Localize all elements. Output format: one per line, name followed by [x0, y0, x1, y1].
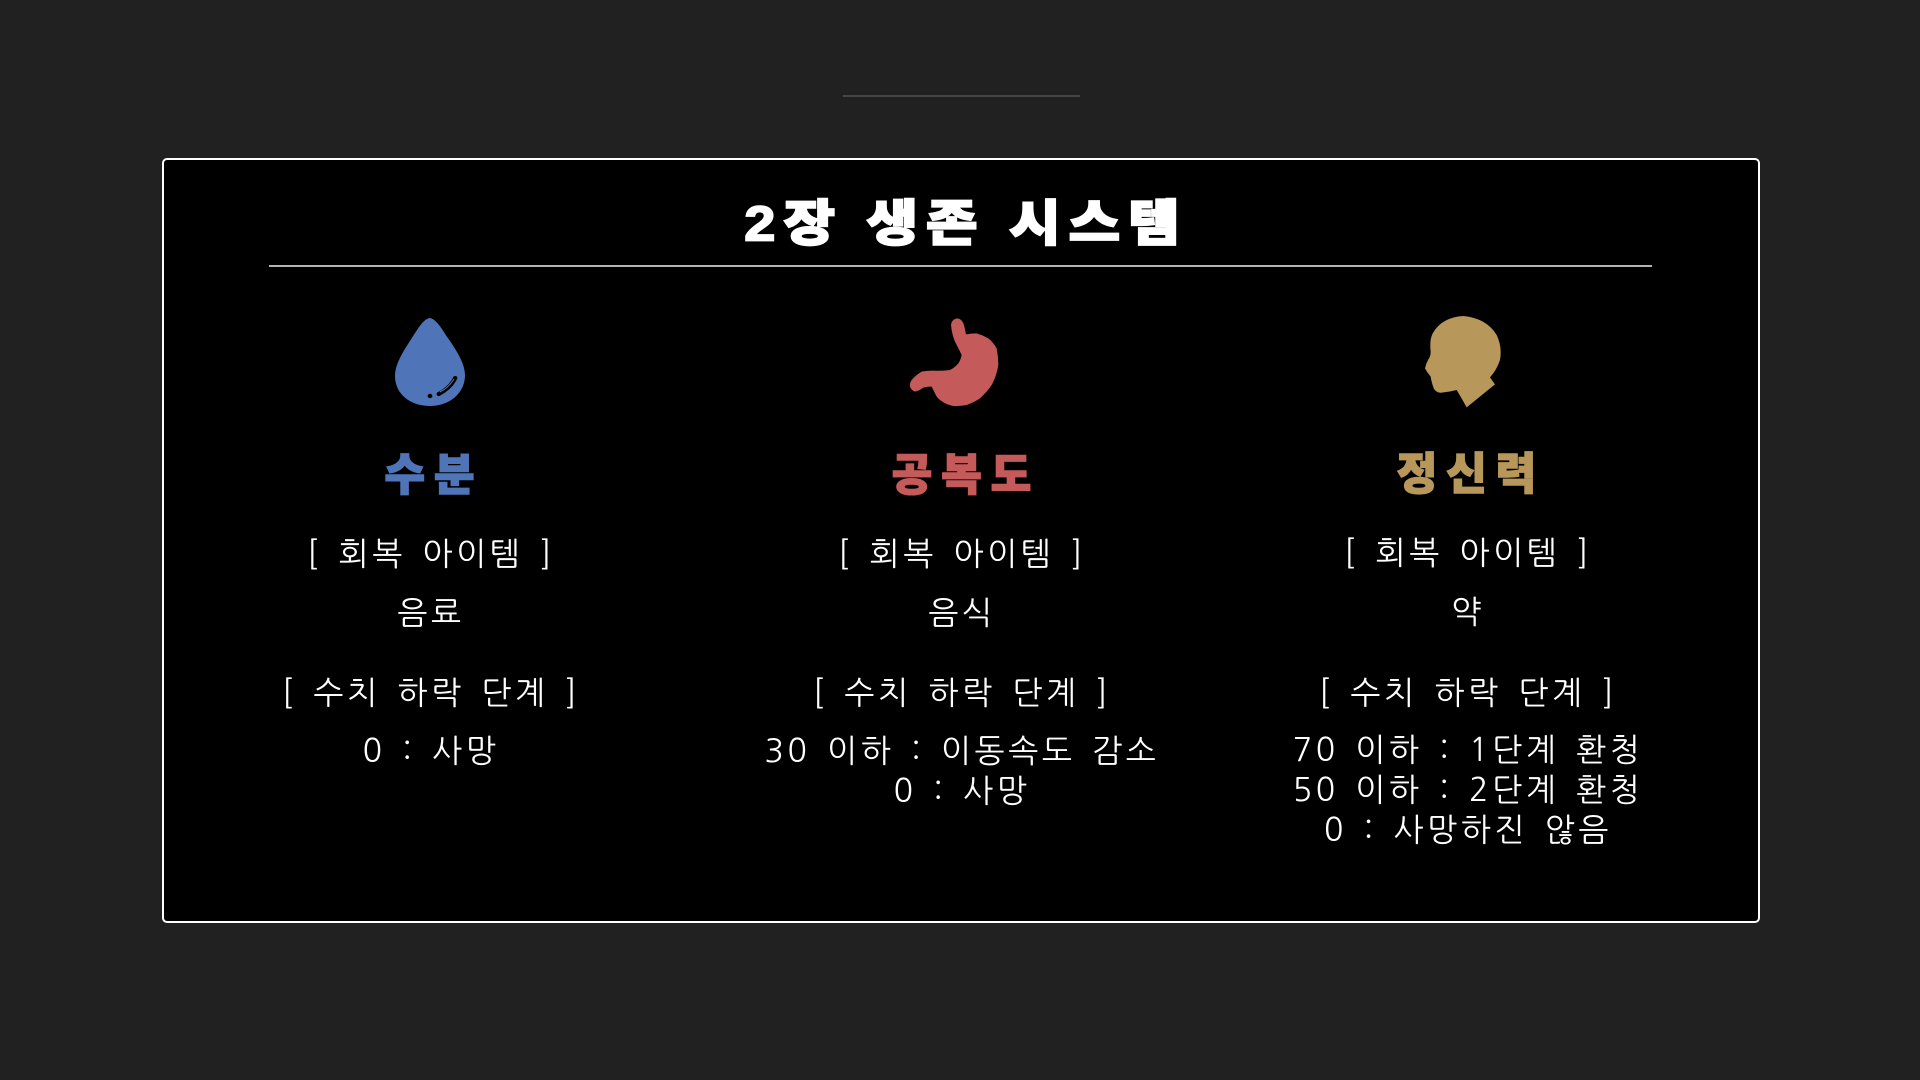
top divider line	[843, 95, 1080, 97]
title rule	[269, 265, 1652, 267]
decline stages: 70 이하 : 1단계 환청 50 이하 : 2단계 환청 0 : 사망하진 않음	[1293, 734, 1643, 846]
column: mental	[1293, 316, 1643, 846]
recovery label: [ 회복 아이템 ]	[307, 538, 555, 570]
icon: head silhouette	[1425, 316, 1501, 408]
title: 2장 생존 시스템	[744, 196, 1188, 251]
column: water	[282, 318, 580, 767]
panel: survival system	[162, 158, 1760, 923]
decline label: [ 수치 하락 단계 ]	[1319, 677, 1617, 709]
column: hunger	[765, 318, 1159, 807]
recovery label: [ 회복 아이템 ]	[1344, 537, 1592, 569]
decline stages: 30 이하 : 이동속도 감소 0 : 사망	[765, 735, 1159, 807]
decline stages: 0 : 사망	[363, 735, 499, 767]
recovery item: 음료	[397, 597, 465, 629]
decline label: [ 수치 하락 단계 ]	[813, 677, 1111, 709]
icon: stomach	[910, 318, 998, 406]
heading: mental: 정신력	[1397, 450, 1545, 499]
heading: water: 수분	[385, 451, 483, 500]
icon: water drop	[395, 318, 465, 406]
heading: hunger: 공복도	[892, 451, 1040, 500]
recovery item: 음식	[928, 597, 996, 629]
decline label: [ 수치 하락 단계 ]	[282, 677, 580, 709]
recovery item: 약	[1451, 596, 1485, 628]
recovery label: [ 회복 아이템 ]	[838, 538, 1086, 570]
